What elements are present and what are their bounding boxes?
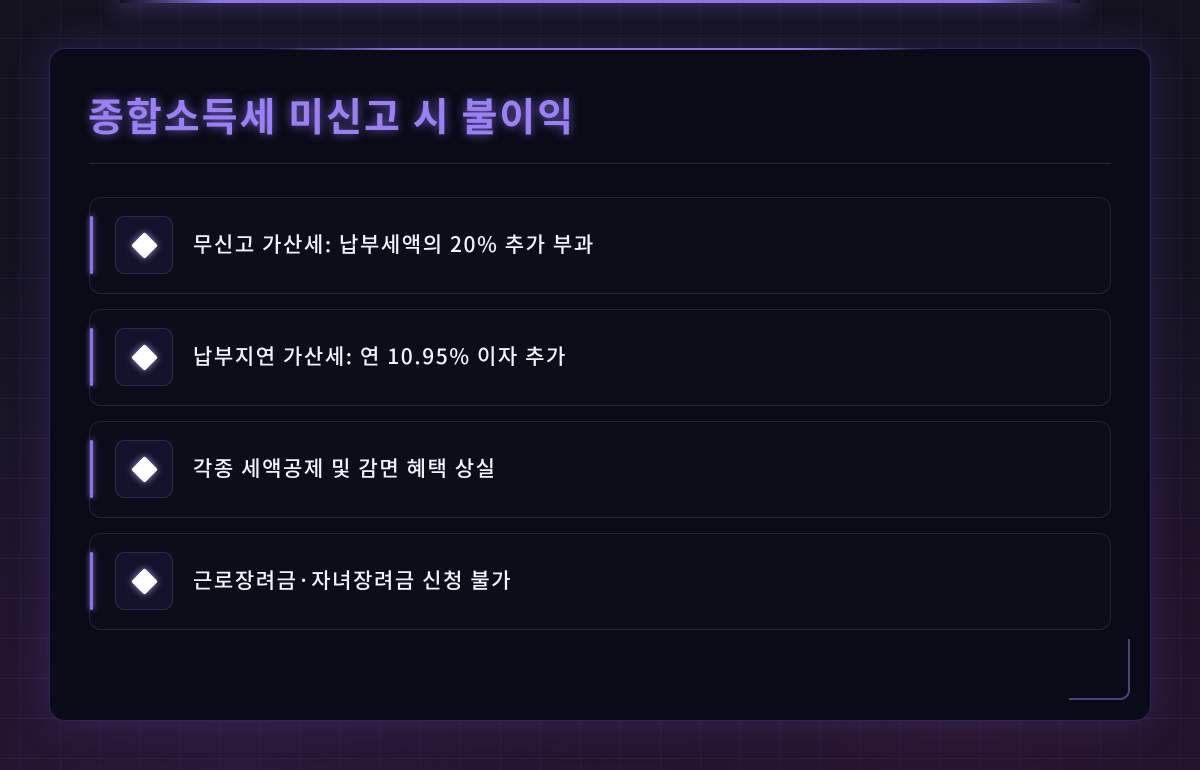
corner bracket xyxy=(1069,639,1130,700)
icon: diamond xyxy=(115,216,173,274)
title: 종합소득세 미신고 시 불이익 xyxy=(88,87,575,143)
item: late payment penalty xyxy=(89,309,1111,406)
item: no-filing penalty xyxy=(89,197,1111,294)
icon: diamond xyxy=(115,552,173,610)
icon: diamond xyxy=(115,440,173,498)
text: 납부지연 가산세: 연 10.95% 이자 추가 xyxy=(193,341,567,371)
item: loss of deductions xyxy=(89,421,1111,518)
item: incentive ineligibility xyxy=(89,533,1111,630)
icon: diamond xyxy=(115,328,173,386)
text: 근로장려금·자녀장려금 신청 불가 xyxy=(193,565,512,595)
text: 무신고 가산세: 납부세액의 20% 추가 부과 xyxy=(193,229,595,259)
text: 각종 세액공제 및 감면 혜택 상실 xyxy=(193,453,497,483)
